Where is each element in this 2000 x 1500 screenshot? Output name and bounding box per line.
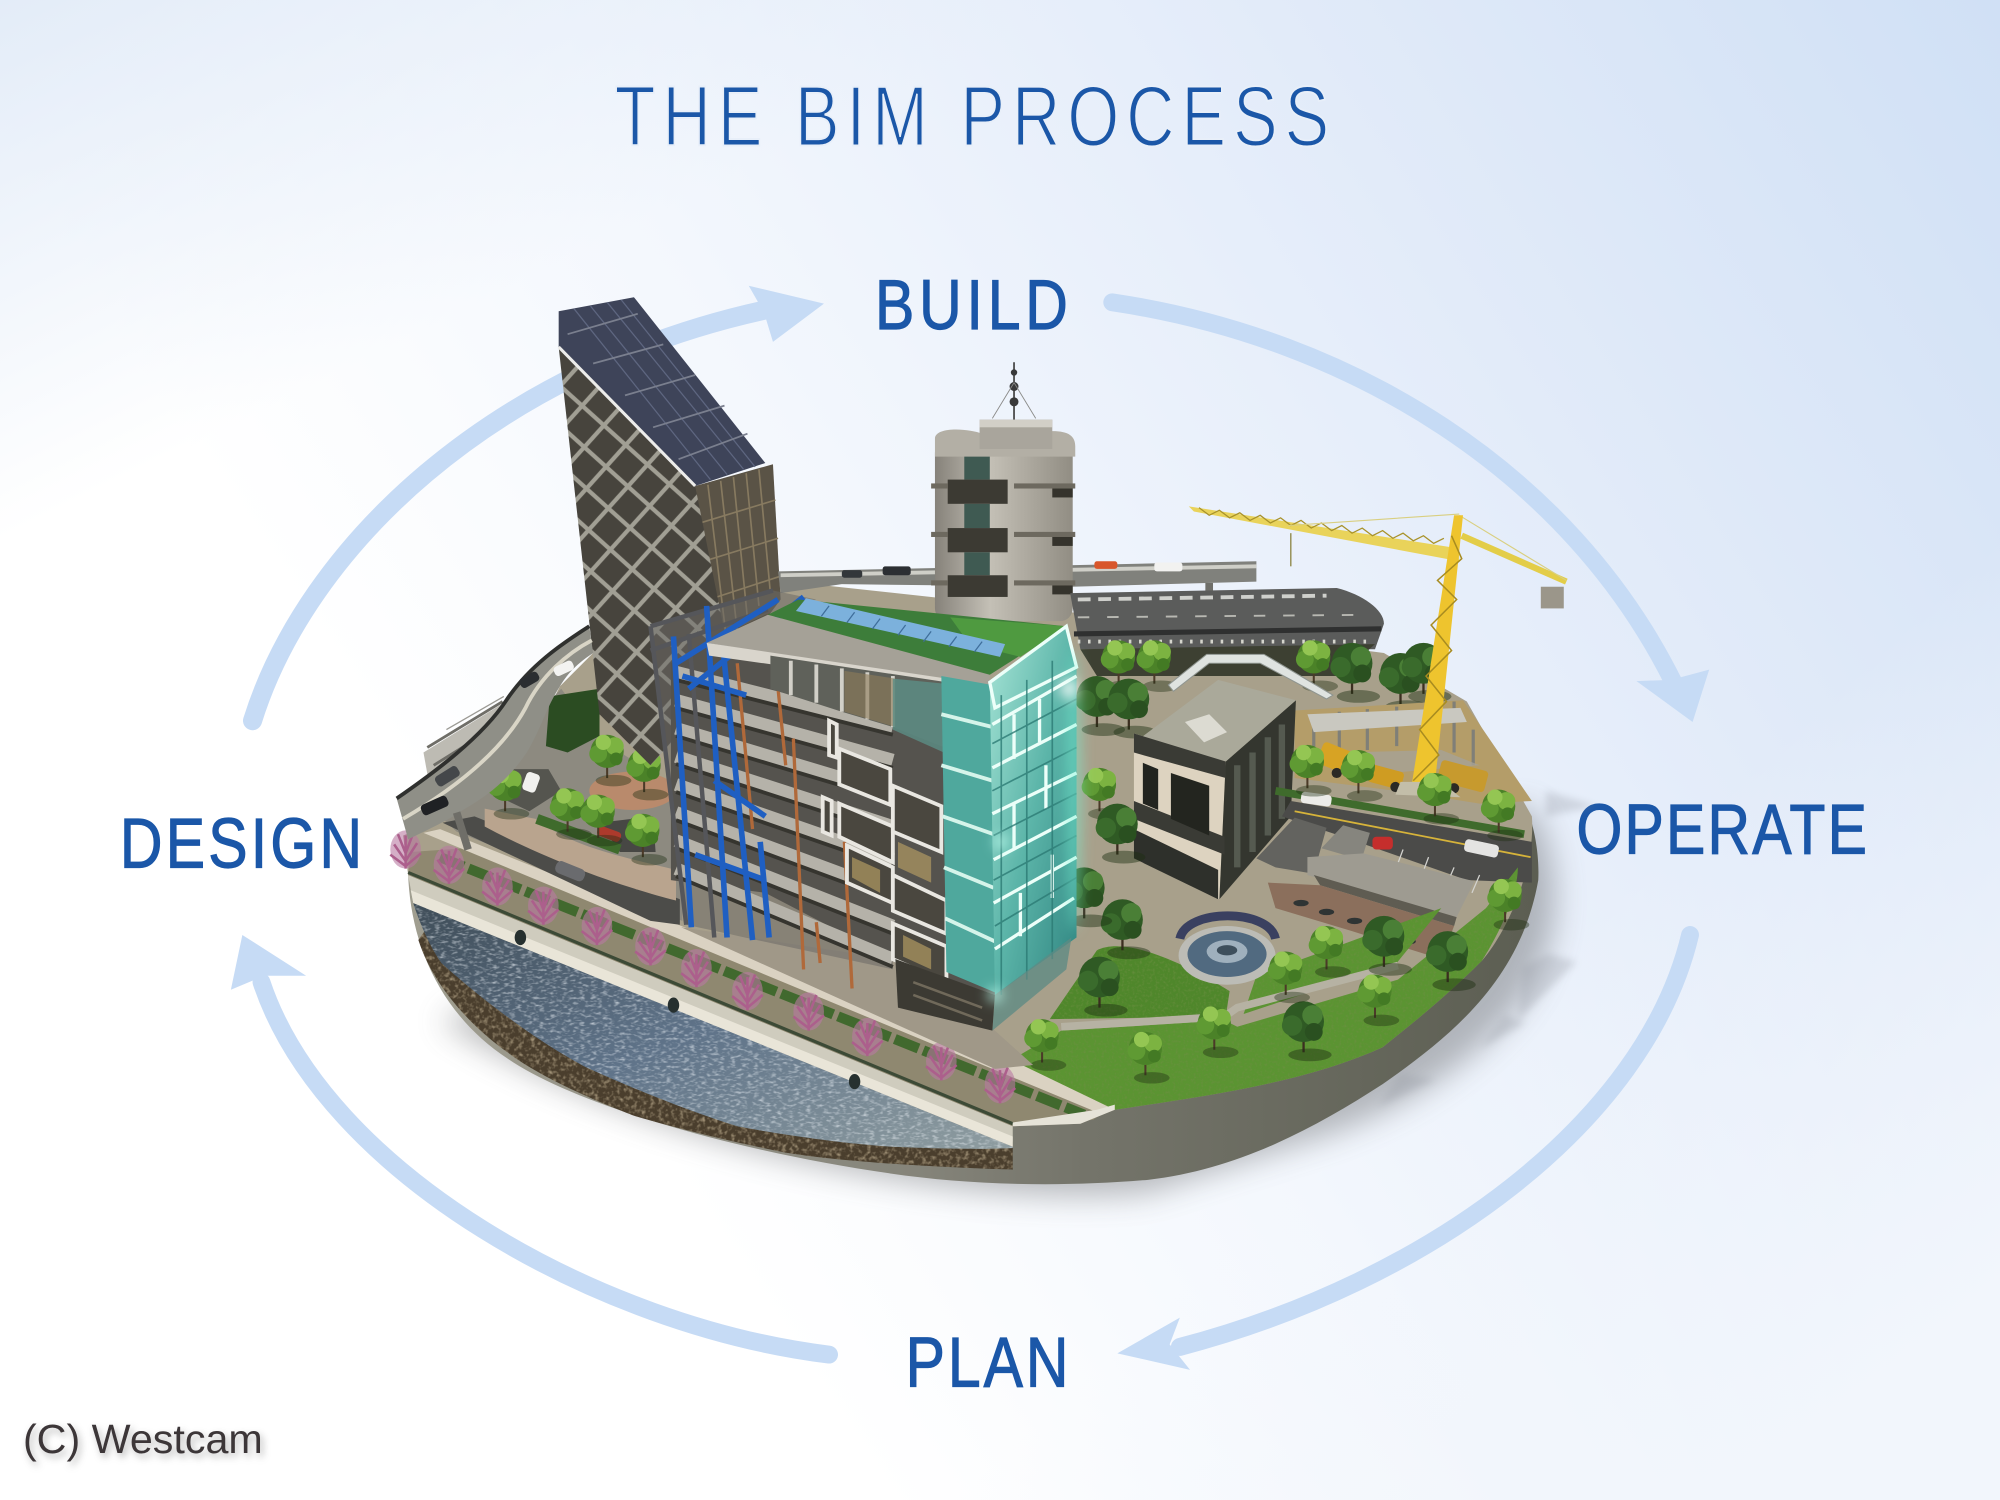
rear elevated highway xyxy=(778,561,1256,593)
left street and plaza xyxy=(440,689,682,925)
copyright: (C) Westcam xyxy=(23,1416,263,1462)
label: operate: OPERATE xyxy=(1577,789,1867,868)
disc top surface xyxy=(403,580,1532,1126)
construction site xyxy=(1295,700,1532,804)
tower side face xyxy=(695,464,781,689)
title: THE BIM PROCESS xyxy=(615,70,1329,164)
arrow: build to operate xyxy=(1112,302,1709,722)
tower solar roof xyxy=(559,297,765,486)
road and parking xyxy=(1276,791,1532,895)
parking shelter roof xyxy=(1256,818,1474,926)
disc side wall xyxy=(408,811,1538,1184)
dark lobby xyxy=(895,959,995,1031)
glow sparkles xyxy=(989,651,1082,1001)
yellow construction vehicles xyxy=(1316,741,1489,793)
elevated curved road xyxy=(397,626,593,849)
tower crane xyxy=(1189,506,1566,797)
dark steel frame xyxy=(651,591,773,938)
floor decks xyxy=(676,672,893,967)
tower roof edge xyxy=(559,347,695,486)
diagonal lattice tower xyxy=(559,297,781,765)
teal glass side xyxy=(990,626,1077,995)
green roof xyxy=(768,599,1066,675)
lower glass lobby xyxy=(992,938,1071,1031)
arrow: operate to plan xyxy=(1117,935,1690,1370)
rear trees xyxy=(1075,640,1452,739)
label: build: BUILD xyxy=(875,265,1068,344)
orange columns xyxy=(737,663,852,989)
dark roadway platform xyxy=(1070,588,1384,676)
concrete round tower xyxy=(931,362,1075,621)
rail tracks xyxy=(423,696,508,781)
cast shadow xyxy=(440,791,1597,1196)
low-rise office building xyxy=(1134,680,1296,899)
river water xyxy=(408,893,1020,1154)
pedestrian bridge xyxy=(1168,654,1333,699)
upper windows xyxy=(770,656,990,765)
low-rise right face xyxy=(1219,700,1296,899)
roof solar strip xyxy=(796,598,1005,657)
white balcony boxes xyxy=(823,721,946,982)
teal glass front xyxy=(941,676,995,992)
arrow: design to build xyxy=(253,286,824,721)
blue structural columns xyxy=(673,597,804,940)
arrow: plan to design xyxy=(231,935,829,1355)
label: plan: PLAN xyxy=(906,1323,1068,1402)
roof slab xyxy=(707,615,990,689)
warm interiors xyxy=(852,842,931,969)
soil layer xyxy=(418,932,1013,1170)
low-rise roof xyxy=(1142,680,1296,761)
island illustration xyxy=(390,297,1597,1196)
embankment wall xyxy=(408,875,1013,1147)
main glass building xyxy=(651,591,1082,1069)
label: design: DESIGN xyxy=(120,803,362,883)
patio xyxy=(1268,883,1454,959)
rear steel structure xyxy=(651,591,893,969)
front facade body xyxy=(671,643,995,995)
pink trees xyxy=(390,830,1015,1103)
left trees xyxy=(487,735,668,865)
fountain xyxy=(1179,916,1276,985)
building ground plaza xyxy=(681,927,1033,1069)
wireframe floor lines xyxy=(990,626,1077,949)
riverside planting strip xyxy=(408,829,1120,1126)
lawns xyxy=(1008,861,1524,1116)
low-rise left face xyxy=(1134,733,1226,899)
tower fins xyxy=(700,469,779,644)
disc rim cut corner xyxy=(1013,1105,1115,1126)
tower lattice face xyxy=(559,347,733,765)
lawn trees xyxy=(1024,745,1529,1084)
